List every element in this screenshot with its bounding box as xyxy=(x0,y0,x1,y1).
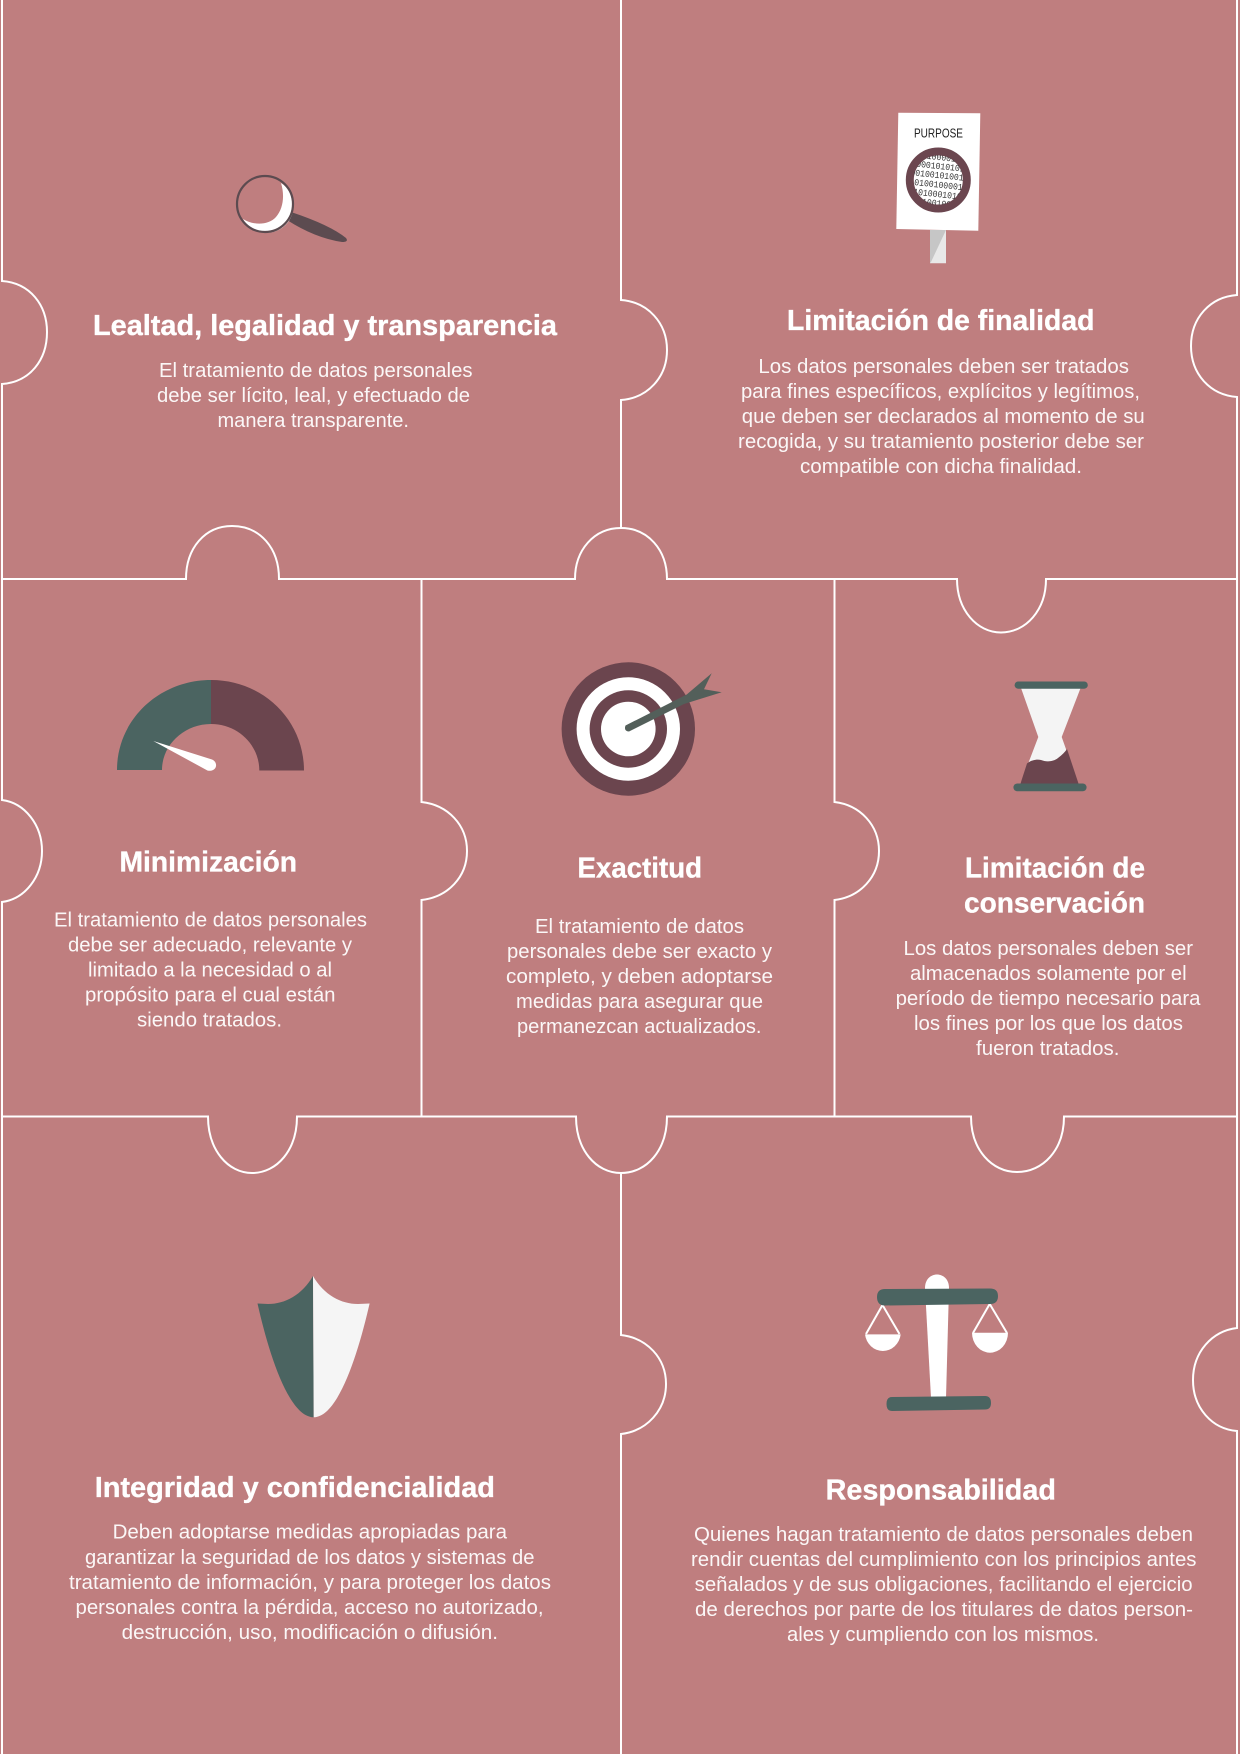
panel: Exactitud xyxy=(506,662,773,1038)
icon: purpose sign: 01010010000100 xyxy=(904,177,973,194)
text block: señalados y de sus obligaciones, facilitando el ejercicio xyxy=(695,1574,1193,1596)
text block: almacenados solamente por el xyxy=(910,963,1187,985)
icon: purpose sign: 00101000101010 xyxy=(903,186,972,204)
text block: Deben adoptarse medidas apropiadas para xyxy=(113,1522,508,1544)
text block: completo, y deben adoptarse xyxy=(506,966,773,988)
panel: Responsabilidad xyxy=(691,1274,1196,1646)
text block: tratamiento de información, y para proteger los datos xyxy=(69,1572,551,1594)
text block: Los datos personales deben ser tratados xyxy=(758,356,1129,378)
icon: purpose sign: 00101000010000 xyxy=(907,150,976,167)
panel: Minimización xyxy=(54,680,367,1032)
text block: de derechos por parte de los titulares de datos person- xyxy=(695,1599,1193,1621)
text block: rendir cuentas del cumplimiento con los principios antes xyxy=(691,1549,1196,1571)
text block: destrucción, uso, modificación o difusión. xyxy=(122,1622,498,1644)
icon: purpose sign: 01000101010100 xyxy=(906,159,975,176)
icon: purpose sign: 10010010100101 xyxy=(905,168,974,185)
text block: permanezcan actualizados. xyxy=(517,1016,762,1038)
heading: Minimización xyxy=(120,846,297,878)
text block: período de tiempo necesario para xyxy=(896,988,1201,1010)
text block: personales contra la pérdida, acceso no autorizado, xyxy=(76,1597,544,1619)
heading: Responsabilidad xyxy=(826,1474,1056,1506)
icon: hourglass xyxy=(1013,682,1088,791)
heading: Limitación de xyxy=(965,853,1145,885)
text block: El tratamiento de datos personales xyxy=(54,910,367,932)
text block: propósito para el cual están xyxy=(85,985,336,1007)
text block: siendo tratados. xyxy=(137,1010,282,1032)
text block: los fines por los que los datos xyxy=(914,1013,1183,1035)
panel: Integridad y confidencialidad xyxy=(69,1276,551,1644)
text block xyxy=(691,1524,1196,1646)
icon: gauge xyxy=(117,680,304,771)
icon: purpose sign: PURPOSE xyxy=(914,126,963,140)
text block: medidas para asegurar que xyxy=(516,991,763,1013)
text block xyxy=(738,356,1145,478)
text block xyxy=(896,938,1201,1060)
heading: Integridad y confidencialidad xyxy=(95,1472,495,1504)
panel: Lealtad, legalidad y transparencia xyxy=(93,176,558,432)
text block: Quienes hagan tratamiento de datos personales deben xyxy=(694,1524,1193,1546)
text block: debe ser lícito, leal, y efectuado de xyxy=(157,385,470,407)
heading xyxy=(964,853,1145,920)
text block: limitado a la necesidad o al xyxy=(88,960,332,982)
text block: fueron tratados. xyxy=(976,1038,1119,1060)
text block: garantizar la seguridad de los datos y sistemas de xyxy=(85,1547,534,1569)
text block xyxy=(157,360,472,432)
text block: manera transparente. xyxy=(218,410,409,432)
text block: ales y cumpliendo con los mismos. xyxy=(787,1624,1099,1646)
heading: Exactitud xyxy=(578,853,702,885)
icon: shield xyxy=(258,1276,370,1417)
heading: conservación xyxy=(964,888,1145,920)
text block: debe ser adecuado, relevante y xyxy=(68,935,352,957)
text block: Los datos personales deben ser xyxy=(904,938,1193,960)
icon: purpose sign: 01001001000101 xyxy=(902,195,971,212)
text block: personales debe ser exacto y xyxy=(507,941,772,963)
text block xyxy=(69,1522,551,1644)
icon: magnifying glass xyxy=(237,176,347,242)
icon: target with arrow xyxy=(562,662,722,796)
text block: para fines específicos, explícitos y legítimos, xyxy=(741,381,1140,403)
icon: balance scale xyxy=(865,1274,1008,1411)
text block xyxy=(54,910,367,1032)
heading: Lealtad, legalidad y transparencia xyxy=(93,310,558,342)
heading: Limitación de finalidad xyxy=(787,305,1094,337)
text block: El tratamiento de datos xyxy=(535,916,744,938)
text block: recogida, y su tratamiento posterior debe ser xyxy=(738,431,1144,453)
text block xyxy=(506,916,773,1038)
text block: El tratamiento de datos personales xyxy=(159,360,472,382)
icon: purpose sign xyxy=(896,113,980,263)
panel: Limitación de finalidad xyxy=(738,113,1145,478)
text block: que deben ser declarados al momento de su xyxy=(742,406,1145,428)
panel: Limitación de conservación xyxy=(896,682,1201,1060)
text block: compatible con dicha finalidad. xyxy=(800,456,1082,478)
